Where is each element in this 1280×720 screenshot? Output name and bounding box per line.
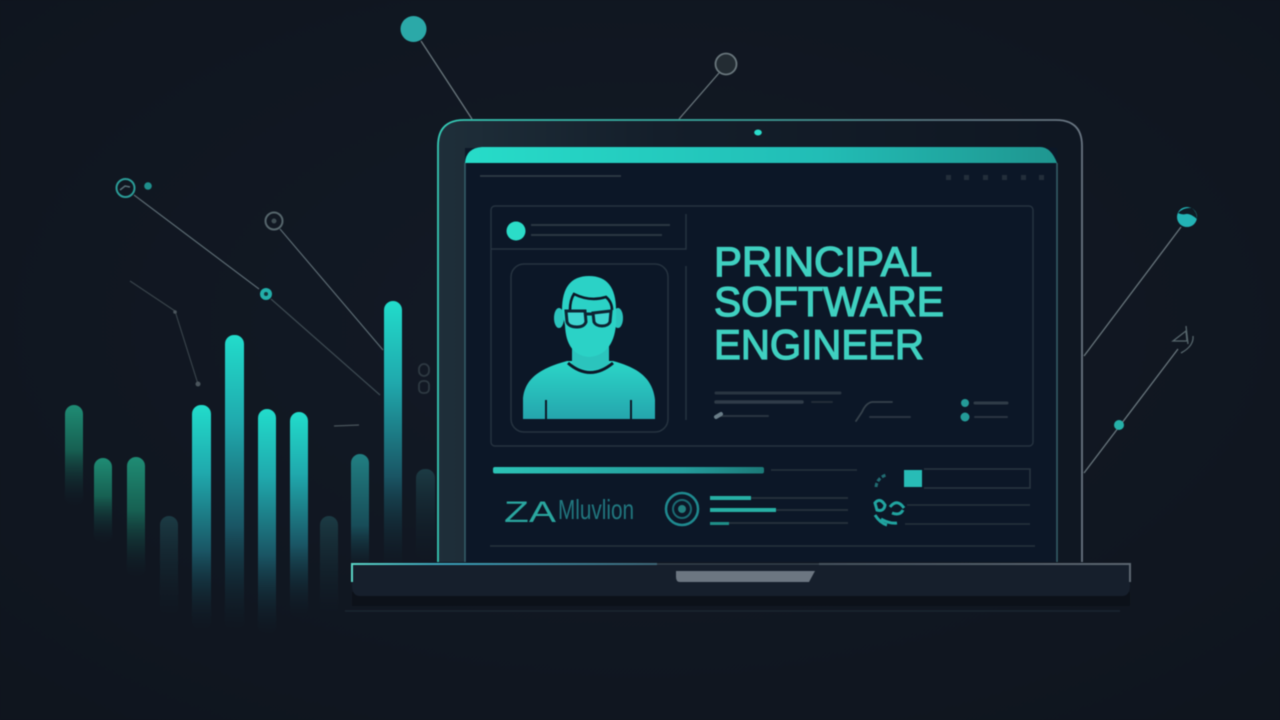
node: teal dot xyxy=(260,288,272,300)
icon: dotted arc xyxy=(876,475,886,487)
node: top teal xyxy=(400,16,426,42)
hinge icon xyxy=(419,364,429,393)
title xyxy=(714,238,944,368)
laptop lid xyxy=(438,120,1082,562)
panel: right widgets xyxy=(875,469,1030,525)
network lines and nodes, right xyxy=(1084,207,1197,473)
node: grey ring xyxy=(266,212,282,230)
icon: contact glyph xyxy=(961,399,969,407)
icon: contact glyph xyxy=(960,412,970,422)
icon: swirl emblem xyxy=(875,500,904,525)
skill bars xyxy=(710,496,848,525)
screen bottom divider xyxy=(490,545,1035,547)
network lines and nodes, left xyxy=(116,179,383,426)
icon: teal square xyxy=(904,470,922,487)
node: small teal xyxy=(144,182,152,190)
node: ring left xyxy=(116,179,134,197)
node: top grey ring xyxy=(716,54,736,74)
screen xyxy=(465,148,1057,562)
avatar: person with glasses xyxy=(523,276,655,419)
bar chart xyxy=(65,301,435,634)
laptop base xyxy=(345,564,1130,611)
panel: avatar frame xyxy=(511,264,668,432)
field box xyxy=(924,469,1030,488)
logo text: ZA xyxy=(504,496,556,529)
title: PRINCIPAL xyxy=(714,238,932,285)
icon: small link xyxy=(716,414,721,417)
panel: profile card xyxy=(491,206,1033,446)
title: ENGINEER xyxy=(714,321,924,368)
title: SOFTWARE xyxy=(714,278,944,325)
screen title bar xyxy=(465,147,1057,163)
icon: spiral xyxy=(666,493,698,525)
laptop notch xyxy=(676,571,815,582)
logo text xyxy=(504,494,634,529)
camera xyxy=(754,130,762,136)
panel: status row xyxy=(491,214,686,249)
window dots xyxy=(946,175,1044,180)
detail lines under title xyxy=(716,393,1007,422)
progress bar xyxy=(493,467,857,474)
header line xyxy=(480,175,621,177)
node: globe xyxy=(1177,207,1197,227)
icon: triangle ruler xyxy=(1173,326,1193,353)
network lines and nodes, top xyxy=(400,16,736,119)
node: teal gem xyxy=(1114,420,1124,430)
logo text: Mluvlion xyxy=(558,494,634,525)
